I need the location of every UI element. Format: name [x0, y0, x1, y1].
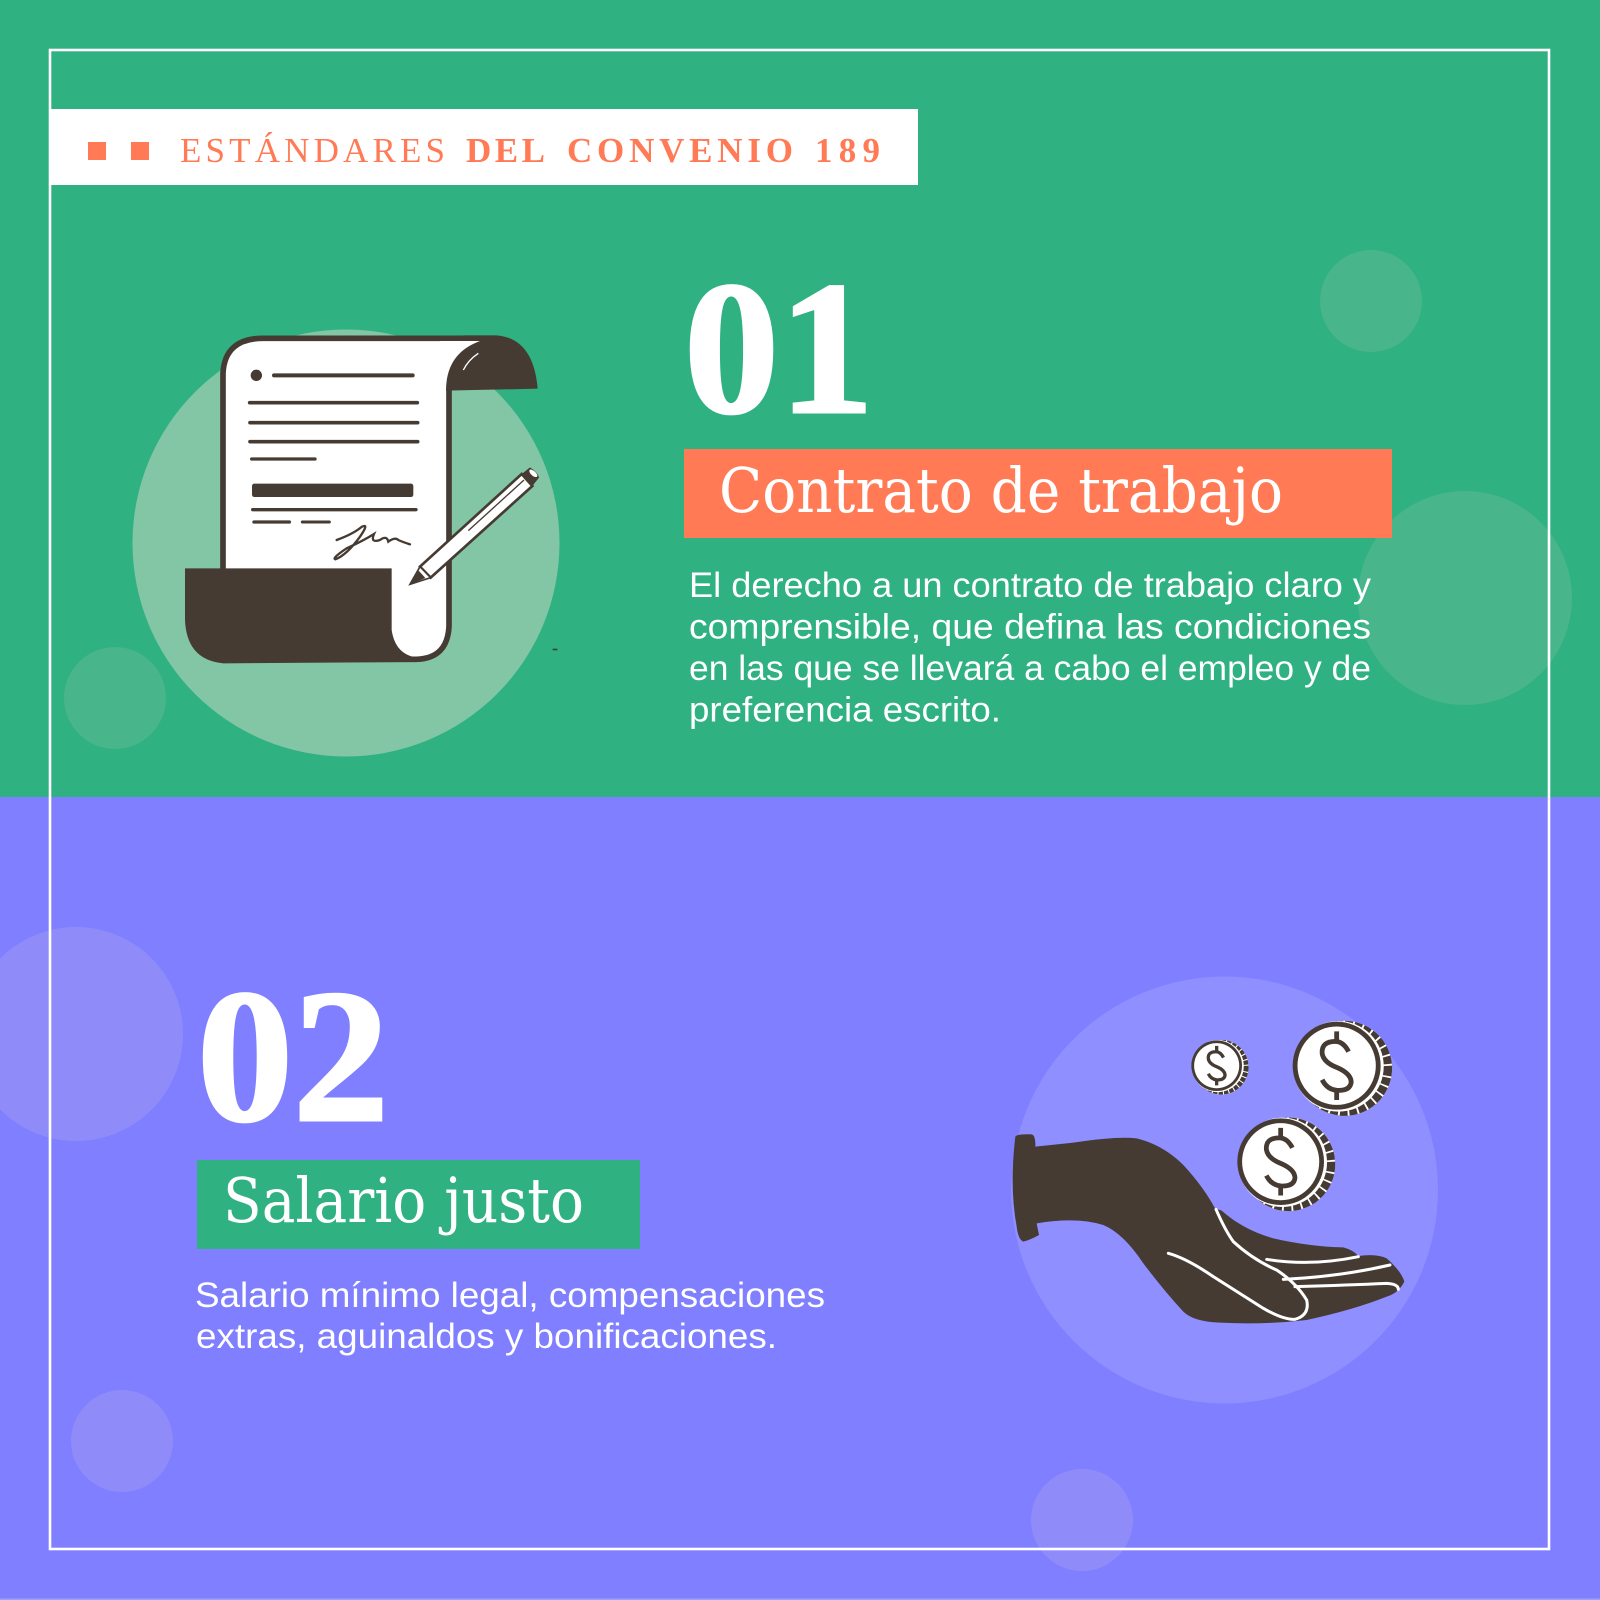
- number 01: 01: [684, 244, 874, 454]
- banner: estándares del convenio 189: [51, 109, 918, 185]
- banner text: [180, 131, 880, 170]
- text block: salario description: extras, aguinaldos y bonificaciones.: [196, 1316, 777, 1356]
- bubble: upper left: [0, 927, 183, 1141]
- text block: contrato description: comprensible, que defina las condiciones: [689, 606, 1371, 646]
- heading: salario justo: Salario justo: [223, 1164, 584, 1237]
- icon: contract with pencil: [132, 330, 560, 756]
- banner text: DEL: [466, 131, 545, 170]
- text block: contrato description: El derecho a un contrato de trabajo claro y: [689, 565, 1371, 605]
- banner text: CONVENIO: [567, 131, 793, 170]
- heading: contrato de trabajo: Contrato de trabajo: [719, 454, 1283, 527]
- number 02: 02: [197, 952, 389, 1162]
- bubble: top right: [1320, 250, 1422, 352]
- bubble: middle right: [1358, 491, 1572, 705]
- text block: contrato description: [689, 565, 1371, 730]
- coin: medium: [1237, 1117, 1335, 1211]
- banner squares: [88, 142, 149, 160]
- panel: contrato de trabajo: [0, 0, 1600, 797]
- text block: salario description: Salario mínimo legal, compensaciones: [195, 1275, 825, 1315]
- banner text: 189: [815, 131, 880, 170]
- banner text: ESTÁNDARES: [180, 131, 445, 170]
- text block: salario description: [195, 1275, 825, 1356]
- icon: hand with coins: [1011, 976, 1438, 1404]
- bubble: lower left: [71, 1390, 173, 1492]
- bubble: left: [64, 647, 166, 749]
- panel: salario justo: [0, 797, 1600, 1600]
- hand: [1013, 1134, 1404, 1323]
- bubble: bottom: [1031, 1469, 1133, 1571]
- text block: contrato description: en las que se llevará a cabo el empleo y de: [689, 648, 1371, 688]
- coin: large: [1293, 1021, 1392, 1116]
- text block: contrato description: preferencia escrito.: [689, 690, 1001, 730]
- coin: small: [1191, 1040, 1249, 1095]
